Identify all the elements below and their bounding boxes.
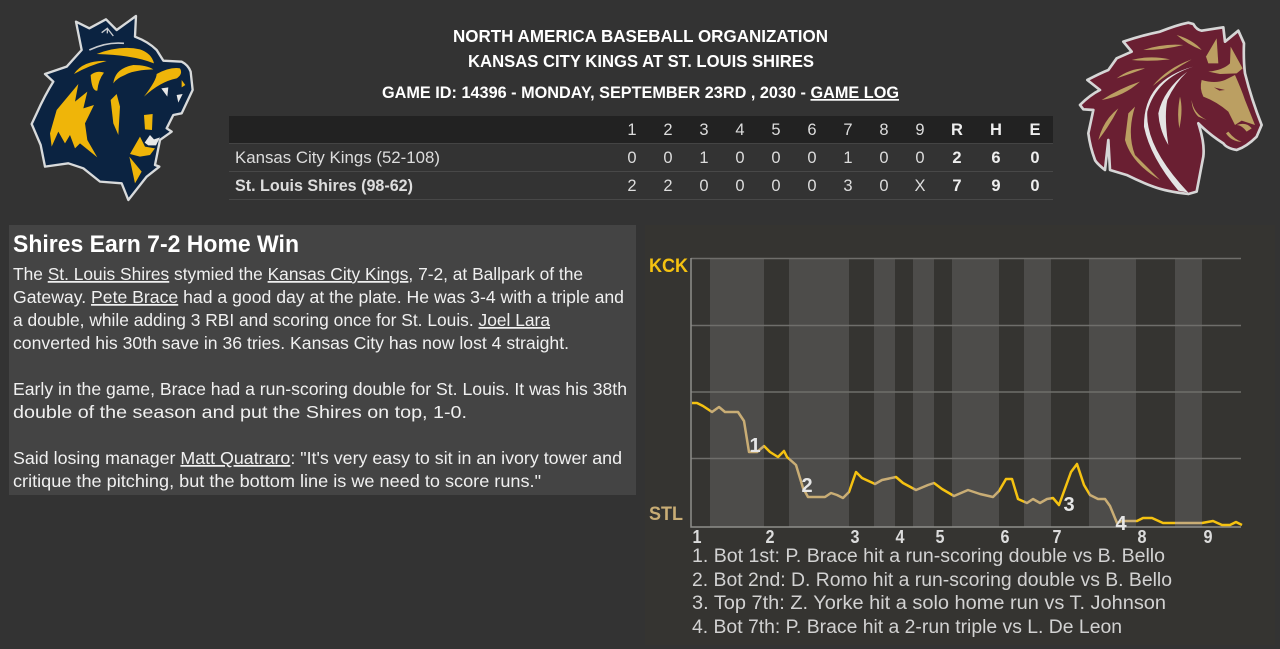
row: St. Louis Shires: 0 [879,177,889,195]
recap heading: Shires Earn 7-2 Home Win [13,231,299,258]
recap text [13,264,627,491]
inning axis labels: 6 [1000,526,1010,547]
half-inning bands [710,259,1202,527]
row: Kansas City Kings: 1 [843,149,853,167]
event markers: 1 [749,435,761,457]
inning axis labels: 1 [692,526,702,547]
recap text: converted his 30th save in 36 tries. Kansas City has now lost 4 straight. [13,333,569,353]
row: Kansas City Kings: 0 [915,149,925,167]
row: St. Louis Shires: 2 [663,177,673,195]
chart key events: 3. Top 7th: Z. Yorke hit a solo home run vs T. Johnson [692,593,1166,614]
team label STL: STL [649,504,683,525]
header title: GAME ID: 14396 - MONDAY, SEPTEMBER 23RD , 2030 - GAME LOG [382,83,899,102]
row: Kansas City Kings: 0 [627,149,637,167]
header title: KANSAS CITY KINGS AT ST. LOUIS SHIRES [468,51,814,71]
logo: St. Louis Shires horse [1080,23,1262,194]
recap text: Early in the game, Brace had a run-scoring double for St. Louis. It was his 38th [13,379,627,399]
inning axis labels: 4 [896,526,905,547]
inning header row: 8 [879,121,889,139]
inning header row: R [951,121,963,139]
inning header row: 9 [915,121,925,139]
panel: win probability chart [650,258,1242,637]
row: Kansas City Kings: 6 [991,149,1001,167]
row: Kansas City Kings: 0 [807,149,817,167]
row: Kansas City Kings: 0 [879,149,889,167]
inning axis labels: 9 [1204,526,1212,547]
row: Kansas City Kings: 2 [952,149,962,167]
row: St. Louis Shires: 0 [735,177,745,195]
inning header row: H [990,121,1002,139]
row: St. Louis Shires: 0 [771,177,781,195]
row: St. Louis Shires: 9 [991,177,1001,195]
header title [382,26,899,102]
chart key events: 2. Bot 2nd: D. Romo hit a run-scoring double vs B. Bello [692,570,1172,591]
recap text: a double, while adding 3 RBI and scoring once for St. Louis. Joel Lara [13,310,550,330]
row: Kansas City Kings: 0 [735,149,745,167]
recap text: Said losing manager Matt Quatraro: "It's very easy to sit in an ivory tower and [13,448,622,468]
recap text: double of the season and put the Shires on top, 1-0. [13,402,467,422]
recap text: The St. Louis Shires stymied the Kansas City Kings, 7-2, at Ballpark of the [13,264,583,284]
team labels: KCK [649,256,688,277]
chart key events: 1. Bot 1st: P. Brace hit a run-scoring double vs B. Bello [692,546,1165,567]
inning header row: 5 [771,121,781,139]
inning header row: 7 [843,121,853,139]
inning axis labels: 2 [766,526,774,547]
inning axis labels: 7 [1052,526,1062,547]
win probability line [692,403,1242,525]
box score table [229,116,1053,200]
recap text: critique the pitching, but the bottom line is we need to score runs." [13,471,541,491]
row: Kansas City Kings: 1 [699,149,709,167]
inning axis labels: 5 [936,526,944,547]
row: Kansas City Kings: 0 [1030,149,1040,167]
row: St. Louis Shires: 7 [952,177,962,195]
row: St. Louis Shires: 2 [627,177,637,195]
row: Kansas City Kings: Kansas City Kings (52-108) [235,148,440,167]
inning header row: 2 [663,121,673,139]
row: St. Louis Shires: St. Louis Shires (98-62) [235,177,413,195]
row: St. Louis Shires: 0 [699,177,709,195]
header title: NORTH AMERICA BASEBALL ORGANIZATION [453,26,828,46]
inning axis labels: 3 [850,526,860,547]
recap text: Gateway. Pete Brace had a good day at the plate. He was 3-4 with a triple and [13,287,624,307]
row: St. Louis Shires: 3 [843,177,853,195]
panel: game recap [9,225,636,495]
inning axis labels [692,526,1212,547]
inning header row: E [1029,121,1041,139]
inning axis labels: 8 [1138,526,1146,547]
chart key events [692,546,1172,638]
logo: Kansas City Kings lion [32,16,193,200]
row: Kansas City Kings: 0 [771,149,781,167]
event markers: 2 [801,475,813,497]
row: Kansas City Kings [235,148,1040,167]
inning header row: 6 [807,121,817,139]
chart key events: 4. Bot 7th: P. Brace hit a 2-run triple vs L. De Leon [692,617,1122,638]
event markers: 3 [1063,494,1075,516]
inning header row: 3 [699,121,709,139]
row: St. Louis Shires: X [914,177,926,195]
row: St. Louis Shires: 0 [807,177,817,195]
row: Kansas City Kings: 0 [663,149,673,167]
row: St. Louis Shires: 0 [1030,177,1040,195]
inning header row [627,121,1041,139]
inning header row: 4 [735,121,745,139]
row: St. Louis Shires [235,177,1040,195]
inning header row: 1 [627,121,637,139]
event markers [749,435,1127,535]
event markers: 4 [1115,513,1127,535]
